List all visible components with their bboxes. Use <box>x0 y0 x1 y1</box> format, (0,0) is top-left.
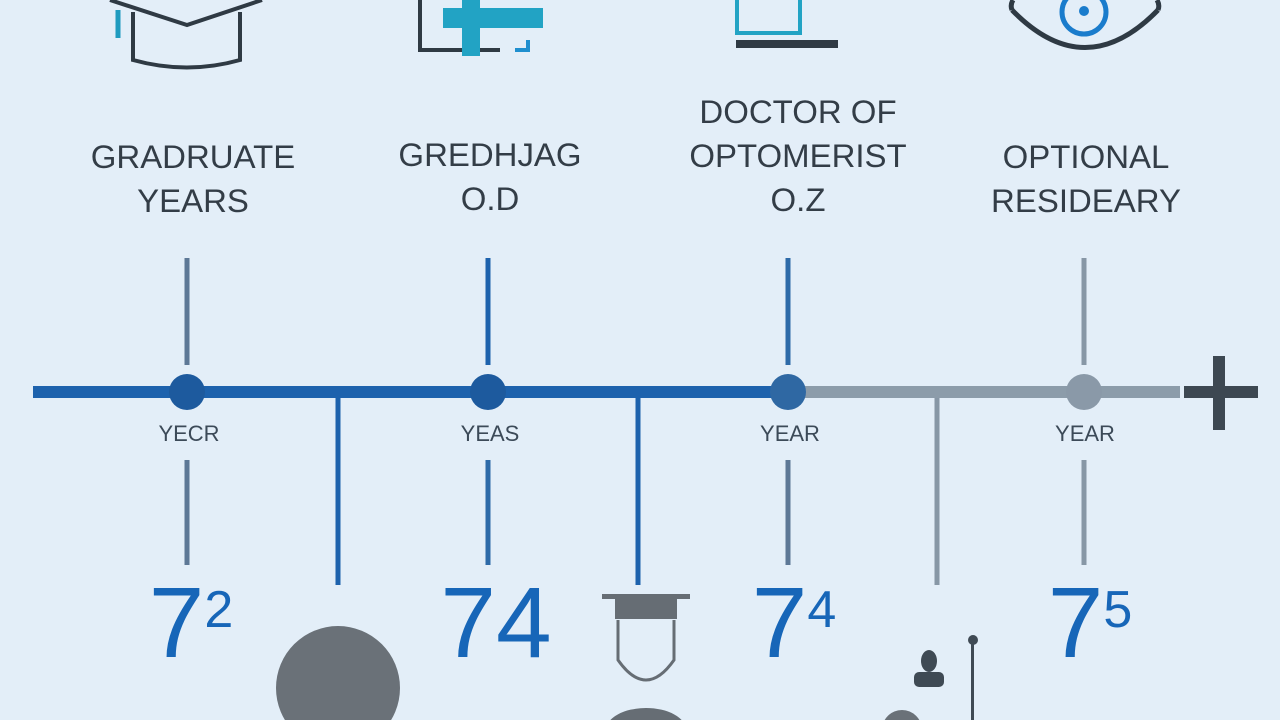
heading: graduate years: YEARS <box>137 183 249 219</box>
heading: optional residency: RESIDEARY <box>991 183 1181 219</box>
text: YEAR <box>1055 421 1115 446</box>
numbers: 72 <box>149 567 233 679</box>
text: YEAS <box>461 421 519 446</box>
heading: gredhjag od: GREDHJAG <box>398 137 582 173</box>
text: 75 <box>1048 567 1132 679</box>
heading: graduate years: GRADRUATE <box>91 139 295 175</box>
icon: person silhouette <box>276 626 400 720</box>
heading: optional residency <box>991 139 1181 219</box>
icon: plus <box>1184 356 1258 430</box>
text: 74 <box>752 567 836 679</box>
text: 74 <box>440 567 552 679</box>
year labels: YECR <box>158 421 220 446</box>
heading: doctor of optomerist: O.Z <box>771 182 825 218</box>
icon: small person <box>882 635 978 720</box>
heading: gredhjag od <box>398 137 582 217</box>
icon: eye <box>1011 0 1159 48</box>
heading: graduate years <box>91 139 295 219</box>
heading: doctor of optomerist: OPTOMERIST <box>689 138 907 174</box>
timeline <box>33 258 1180 585</box>
icon: medical box <box>420 0 543 56</box>
heading: optional residency: OPTIONAL <box>1003 139 1169 175</box>
heading: gredhjag od: O.D <box>461 181 519 217</box>
heading: doctor of optomerist: DOCTOR OF <box>699 94 897 130</box>
icon: graduation cap <box>110 0 262 68</box>
icon: graduate <box>602 594 690 720</box>
heading: doctor of optomerist <box>689 94 907 218</box>
text: YEAR <box>760 421 820 446</box>
icon: book <box>736 0 838 48</box>
